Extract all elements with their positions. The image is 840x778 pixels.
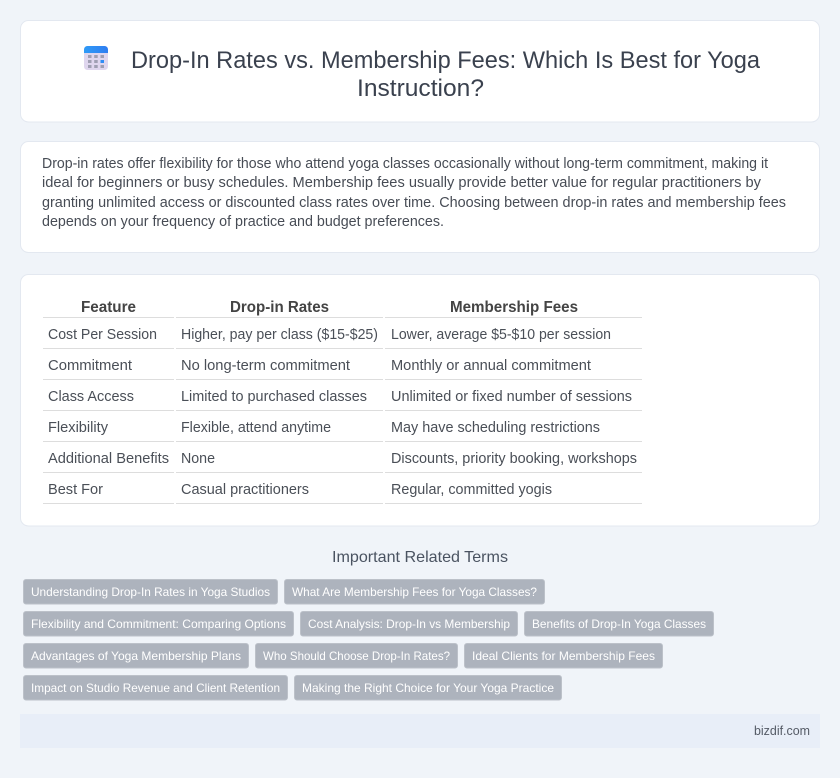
row: best for: Best For xyxy=(48,482,103,498)
tag: Who Should Choose Drop-In Rates? xyxy=(263,649,450,663)
table header: Drop-in Rates xyxy=(230,299,329,316)
row: cost per session xyxy=(48,327,611,343)
row: commitment: Commitment xyxy=(48,358,132,374)
row: class access xyxy=(48,389,632,405)
row: best for xyxy=(48,482,552,498)
row: class access: Unlimited or fixed number of sessions xyxy=(391,389,632,405)
tag: Impact on Studio Revenue and Client Retention xyxy=(31,681,280,695)
tag: Making the Right Choice for Your Yoga Practice xyxy=(302,681,554,695)
panel: introduction xyxy=(20,142,820,252)
tag xyxy=(300,612,518,636)
row: additional benefits: Additional Benefits xyxy=(48,451,169,467)
row: cost per session: Lower, average $5-$10 per session xyxy=(391,327,611,343)
row: additional benefits: None xyxy=(181,451,215,467)
tags: related terms xyxy=(24,580,714,700)
row: class access: Class Access xyxy=(48,389,134,405)
row: commitment: No long-term commitment xyxy=(181,358,350,374)
tag: Benefits of Drop-In Yoga Classes xyxy=(532,617,706,631)
row: flexibility: May have scheduling restrictions xyxy=(391,420,600,436)
table header: Membership Fees xyxy=(450,299,578,316)
footer xyxy=(20,714,820,748)
tag xyxy=(464,644,662,668)
tag: Flexibility and Commitment: Comparing Options xyxy=(31,617,286,631)
text block: introduction: granting unlimited access or discounted class rates over time. Choosing between drop-in rates and membership fees xyxy=(42,195,786,211)
tag: Ideal Clients for Membership Fees xyxy=(472,649,655,663)
title: Drop-In Rates vs. Membership Fees: Which Is Best for Yoga xyxy=(131,47,761,74)
text block: introduction: depends on your frequency of practice and budget preferences. xyxy=(42,214,444,230)
title xyxy=(131,47,761,102)
row: flexibility xyxy=(48,420,600,436)
row: flexibility: Flexibility xyxy=(48,420,109,436)
row: class access: Limited to purchased classes xyxy=(181,389,367,405)
tag xyxy=(24,644,248,668)
tag xyxy=(256,644,458,668)
text block: introduction: ideal for beginners or busy schedules. Membership fees usually provide better value for regular practitioners by xyxy=(42,175,762,191)
row: cost per session: Cost Per Session xyxy=(48,327,157,343)
icon: calendar xyxy=(84,46,108,70)
tag xyxy=(294,676,562,700)
row: best for: Casual practitioners xyxy=(181,482,309,498)
tag xyxy=(24,580,278,604)
panel: comparison table xyxy=(20,274,820,526)
tag: Understanding Drop-In Rates in Yoga Studios xyxy=(31,585,270,599)
heading: important related terms: Important Related Terms xyxy=(332,549,508,566)
tag: Advantages of Yoga Membership Plans xyxy=(31,649,241,663)
row: cost per session: Higher, pay per class ($15-$25) xyxy=(181,327,378,343)
tag xyxy=(24,676,288,700)
tag xyxy=(284,580,544,604)
row: commitment xyxy=(48,358,591,374)
footer: bizdif.com xyxy=(754,724,810,738)
row: additional benefits: Discounts, priority booking, workshops xyxy=(391,451,637,467)
row: best for: Regular, committed yogis xyxy=(391,482,552,498)
title: Instruction? xyxy=(357,75,484,102)
row: commitment: Monthly or annual commitment xyxy=(391,358,591,374)
table header: Feature xyxy=(81,299,136,316)
tag xyxy=(524,612,714,636)
tag: What Are Membership Fees for Yoga Classes? xyxy=(292,585,537,599)
row: additional benefits xyxy=(48,451,637,467)
panel: header xyxy=(20,20,820,122)
tag: Cost Analysis: Drop-In vs Membership xyxy=(308,617,510,631)
text block: introduction: Drop-in rates offer flexibility for those who attend yoga classes occasionally without long-term commitment, making it xyxy=(42,156,768,172)
tag xyxy=(24,612,294,636)
table header xyxy=(81,299,578,316)
row: flexibility: Flexible, attend anytime xyxy=(181,420,331,436)
text block: introduction xyxy=(42,156,786,230)
